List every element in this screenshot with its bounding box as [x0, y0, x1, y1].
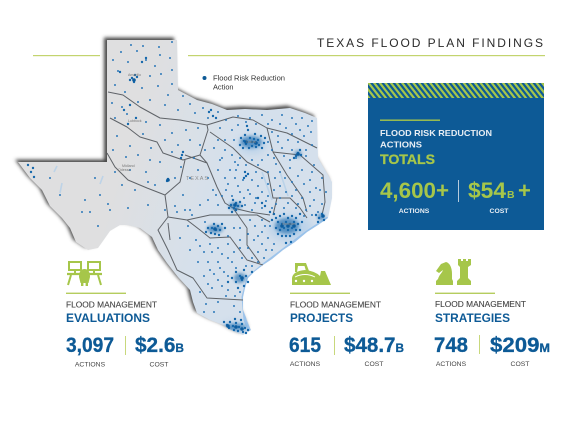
heading: STRATEGIES — [435, 313, 510, 325]
actions number: 4,600+ — [380, 178, 449, 203]
cost number: $209M — [490, 334, 550, 357]
striped band — [368, 83, 544, 98]
city labels: Lubbock — [128, 119, 142, 123]
heading line: FLOOD MANAGEMENT — [290, 300, 381, 310]
divider — [333, 336, 336, 355]
panel: totals: ACTIONS — [380, 140, 422, 150]
cost number: + — [518, 178, 531, 203]
cost caption: COST — [365, 361, 383, 368]
panel: projects — [289, 263, 404, 368]
heading line: FLOOD MANAGEMENT — [66, 300, 157, 310]
actions number: 615 — [289, 334, 321, 357]
actions caption: ACTIONS — [75, 362, 106, 368]
state label: TEXAS — [186, 176, 209, 182]
cost caption: COST — [511, 361, 529, 368]
panel background — [368, 83, 544, 230]
panel rule — [435, 293, 495, 294]
legend text: Flood Risk Reduction — [213, 74, 285, 82]
map shadow — [15, 38, 329, 332]
title: TEXAS FLOOD PLAN FINDINGS — [317, 36, 543, 50]
totals label: TOTALS — [380, 151, 435, 167]
actions caption: ACTIONS — [399, 208, 430, 215]
city hub markers — [134, 80, 323, 329]
actions number: 748 — [434, 334, 468, 357]
city labels — [118, 73, 295, 226]
panel heading: FLOOD RISK REDUCTION — [380, 128, 492, 138]
panel rule — [380, 120, 440, 121]
infographic canvas — [14, 34, 550, 366]
city labels: Houston — [282, 222, 295, 226]
icon: chess pieces — [436, 259, 471, 285]
river basin boundaries — [107, 92, 325, 300]
clustered flood risk reduction action dots — [28, 58, 324, 333]
heading: PROJECTS — [290, 313, 353, 325]
heading line: FLOOD MANAGEMENT — [435, 299, 526, 309]
map legend: Action — [213, 82, 234, 92]
cost number: $2.6B — [135, 334, 184, 357]
legend dot — [202, 76, 206, 80]
header rule right — [188, 55, 545, 56]
city labels: Odessa — [118, 168, 130, 172]
panel rule — [290, 293, 350, 294]
actions caption: ACTIONS — [436, 361, 467, 368]
cost number: $48.7B — [344, 334, 404, 357]
divider — [457, 180, 460, 202]
divider — [478, 335, 481, 354]
city labels: Amarillo — [128, 73, 141, 77]
cost caption: COST — [150, 362, 168, 368]
city labels: Midland — [122, 164, 135, 168]
flood plain wash — [54, 136, 328, 334]
dense cluster shading — [207, 136, 324, 330]
icon: people at desks — [67, 262, 102, 286]
divider — [124, 336, 127, 355]
heading: EVALUATIONS — [66, 313, 150, 325]
actions number: 3,097 — [66, 334, 114, 357]
header rule left — [33, 55, 100, 56]
panel rule — [66, 293, 126, 294]
cost number — [468, 178, 531, 203]
icon: bulldozer — [292, 263, 331, 285]
state shape — [18, 40, 332, 335]
cost number: $54 — [468, 178, 507, 203]
map of Texas with flood risk reduction actions — [15, 38, 332, 335]
actions caption: ACTIONS — [290, 361, 321, 368]
panel: totals — [368, 83, 544, 230]
panel: evaluations — [66, 262, 184, 368]
small flood risk reduction action dots — [50, 42, 326, 312]
map legend — [202, 74, 285, 92]
panel: strategies — [434, 259, 550, 368]
cost caption: COST — [490, 208, 509, 215]
cost number: B — [507, 189, 515, 201]
city labels: Dallas — [246, 140, 256, 144]
